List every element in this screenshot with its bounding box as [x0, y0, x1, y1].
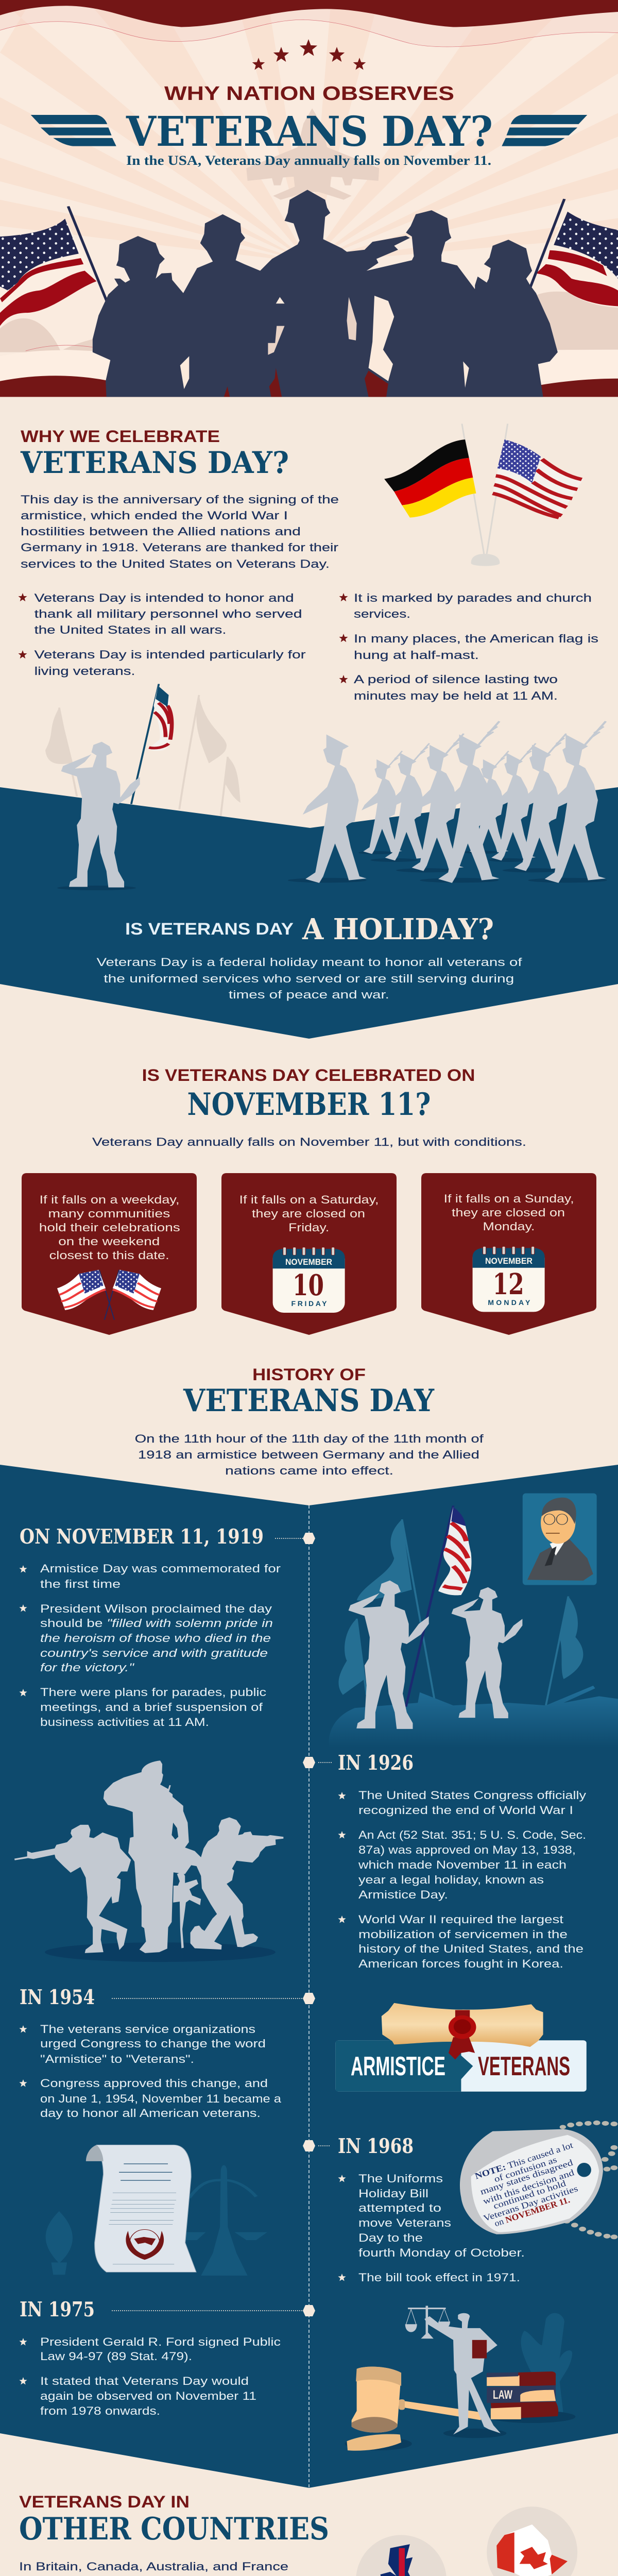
timeline entry 1919: should be "filled with solemn pride in [40, 1617, 273, 1630]
icon: dog tag note: Veterans Day activities [482, 2183, 579, 2223]
card: sunday [421, 1173, 596, 1335]
illustration: document scroll with scales [46, 2145, 267, 2276]
timeline entry 1926: IN 1926 [338, 1751, 414, 1775]
timeline entry 1968: Day to the [358, 2231, 423, 2244]
timeline entry 1919 [19, 1525, 315, 1728]
countries intro: In Britain, Canada, Australia, and France [19, 2560, 288, 2573]
holiday description: the uniformed services who served or are still serving during [104, 972, 514, 985]
timeline entry 1954: on June 1, 1954, November 11 became a [40, 2092, 282, 2105]
intro paragraph: This day is the anniversary of the signing of the [21, 493, 339, 506]
holiday description: Veterans Day is a federal holiday meant to honor all veterans of [97, 956, 523, 969]
card: weekday [22, 1173, 197, 1335]
card: sunday: they are closed on [452, 1206, 565, 1219]
history intro [135, 1432, 484, 1477]
section: why we celebrate [18, 423, 598, 702]
hero banner [0, 0, 618, 397]
bullets left column: the United States in all wars. [35, 623, 227, 636]
card: saturday [221, 1173, 397, 1335]
card: sunday: If it falls on a Sunday, [444, 1192, 574, 1205]
heading: a holiday: A HOLIDAY? [302, 912, 494, 946]
icon: calendar monday 12: NOVEMBER [485, 1256, 533, 1266]
section: veterans day in other countries [18, 2493, 599, 2576]
heading small: IS VETERANS DAY CELEBRATED ON [142, 1066, 475, 1084]
five saluting soldiers silhouette [93, 190, 558, 397]
timeline entry 1926: year a legal holiday, known as [358, 1873, 544, 1886]
intro paragraph: armistice, which ended the World War I [21, 509, 288, 522]
card: saturday: If it falls on a Saturday, [239, 1193, 379, 1206]
heading large: OTHER COUNTRIES [19, 2511, 329, 2547]
timeline entry 1926: Armistice Day. [358, 1888, 448, 1901]
icon: dog tag note: continued to hold [492, 2178, 568, 2211]
heading large: NOVEMBER 11? [187, 1087, 431, 1123]
card: weekday: hold their celebrations [39, 1221, 180, 1234]
intro paragraph [21, 493, 339, 570]
timeline entry 1919: ON NOVEMBER 11, 1919 [20, 1525, 264, 1549]
timeline entry 1968: move Veterans [358, 2216, 451, 2229]
card: saturday: they are closed on [252, 1207, 365, 1220]
hero heading small: WHY NATION OBSERVES [164, 83, 454, 105]
timeline entry 1968: Holiday Bill [358, 2187, 428, 2200]
timeline entry 1919: President Wilson proclaimed the day [40, 1602, 272, 1615]
heading: is veterans day: IS VETERANS DAY [125, 920, 294, 938]
timeline entry 1919: meetings, and a brief suspension of [40, 1701, 263, 1714]
heading large: veterans day: VETERANS DAY [183, 1383, 435, 1419]
illustration: soldiers saluting the flag [329, 1505, 618, 1748]
timeline entry 1926: which made November 11 in each [358, 1858, 566, 1871]
intro paragraph: Germany in 1918. Veterans are thanked for their [21, 541, 338, 554]
map: united kingdom [356, 2535, 447, 2576]
timeline entry 1954 [19, 1986, 315, 2120]
timeline entry 1926: American forces fought in Korea. [358, 1957, 563, 1970]
history intro: 1918 an armistice between Germany and the Allied [138, 1448, 479, 1461]
right american flag [530, 199, 618, 308]
timeline entry 1968: The bill took effect in 1971. [358, 2271, 520, 2284]
icon: calendar friday 10: NOVEMBER [285, 1257, 332, 1267]
timeline entry 1919: country's service and with gratitude [40, 1647, 268, 1659]
timeline entry 1975: President Gerald R. Ford signed Public [40, 2335, 281, 2348]
illustration: justice figure with gavel and books: LAW [493, 2388, 512, 2402]
illustration: three armed soldiers [14, 1760, 283, 1962]
heading small: history of: HISTORY OF [252, 1365, 366, 1384]
bullets right column: It is marked by parades and church [354, 591, 592, 604]
history intro: On the 11th hour of the 11th day of the 11th month of [135, 1432, 484, 1445]
card: weekday: If it falls on a weekday, [39, 1193, 179, 1206]
timeline entry 1926 [303, 1751, 586, 1970]
icon: dog tag note: on NOVEMBER 11. [493, 2195, 571, 2228]
icon: calendar friday 10: FRIDAY [291, 1299, 327, 1308]
stars arc [252, 39, 366, 70]
icon: calendar monday 12: 12 [493, 1267, 524, 1301]
holiday description: times of peace and war. [229, 988, 389, 1001]
bullets left column: living veterans. [35, 665, 135, 677]
timeline entry 1975: It stated that Veterans Day would [40, 2375, 249, 2387]
timeline entry 1919: There were plans for parades, public [40, 1686, 266, 1699]
navy background [0, 1465, 618, 2488]
heading small: why we celebrate: WHY WE CELEBRATE [21, 427, 220, 446]
icon: calendar monday 12: MONDAY [488, 1298, 530, 1307]
bullets right column: A period of silence lasting two [354, 673, 558, 686]
timeline entry 1954: urged Congress to change the word [40, 2037, 266, 2050]
timeline entry 1968: attempted to [358, 2201, 441, 2214]
conditions intro: Veterans Day annually falls on November 11, but with conditions. [92, 1136, 526, 1148]
intro paragraph: hostilities between the Allied nations and [21, 525, 301, 538]
timeline entry 1926: mobilization of servicemen in the [358, 1928, 568, 1941]
bullets left column: Veterans Day is intended to honor and [35, 591, 294, 604]
timeline entry 1926: An Act (52 Stat. 351; 5 U. S. Code, Sec. [358, 1828, 586, 1841]
icon: crossed american flags [57, 1270, 161, 1320]
panel: history timeline [0, 1465, 618, 2488]
background tan flags [45, 695, 241, 816]
bullets left column: thank all military personnel who served [35, 607, 302, 620]
icon: dog tag note: of confusion as [493, 2155, 558, 2184]
hero subtitle: In the USA, Veterans Day annually falls on November 11. [126, 153, 491, 168]
graphic: armistice to veterans scroll [335, 2003, 587, 2092]
wing icon right [502, 115, 587, 146]
section: is veterans day celebrated on november 11 [22, 1066, 596, 1335]
timeline entry 1954: "Armistice" to "Veterans". [40, 2053, 194, 2065]
seal emblem [130, 2230, 160, 2256]
timeline entry 1954: The veterans service organizations [40, 2023, 255, 2036]
illustration: justice figure with gavel and books [345, 2306, 575, 2451]
graphic: armistice to veterans scroll: ARMISTICE [351, 2052, 445, 2081]
bullets left column [18, 591, 306, 677]
timeline entry 1919: the heroism of those who died in the [40, 1632, 271, 1645]
bullets right column: minutes may be held at 11 AM. [354, 689, 558, 702]
timeline entry 1926: 87a) was approved on May 13, 1938, [358, 1843, 576, 1856]
timeline entry 1919: the first time [40, 1578, 121, 1590]
timeline entry 1975 [19, 2298, 315, 2417]
bullets right column: services. [354, 607, 410, 620]
bullets right column: hung at half-mast. [354, 649, 479, 662]
background scales of justice [185, 2165, 267, 2276]
timeline entry 1975: from 1978 onwards. [40, 2404, 160, 2417]
timeline entry 1954: Congress approved this change, and [40, 2077, 268, 2090]
icon: dog tag note [460, 2121, 617, 2239]
icon: dog tag note: with this decision and [482, 2167, 576, 2206]
timeline entry 1968: The Uniforms [358, 2172, 443, 2185]
heading large: veterans day: VETERANS DAY? [20, 445, 289, 480]
country maps with calendar [356, 2506, 599, 2576]
background plant [46, 2211, 73, 2275]
timeline entry 1926: recognized the end of World War I [358, 1804, 573, 1817]
intro paragraph: services to the United States on Veterans Day. [21, 557, 330, 570]
saluting soldier with american flag [57, 684, 172, 890]
bullets right column: In many places, the American flag is [354, 632, 598, 645]
map: canada [487, 2506, 577, 2576]
icon: portrait of president wilson [523, 1493, 597, 1585]
card: saturday: Friday. [288, 1221, 329, 1234]
history intro: nations came into effect. [225, 1464, 393, 1477]
bullets right column [339, 591, 598, 702]
timeline entry 1954: day to honor all American veterans. [40, 2107, 261, 2120]
timeline entry 1919: for the victory." [40, 1661, 134, 1674]
icon: german and american desk flags [384, 423, 583, 566]
card: weekday: closest to this date. [49, 1249, 169, 1262]
timeline entry 1975: IN 1975 [20, 2298, 95, 2321]
marching soldiers [288, 721, 607, 883]
holiday description [97, 956, 523, 1001]
icon: dog tag note: NOTE: This caused a lot [474, 2140, 574, 2181]
timeline entry 1968: fourth Monday of October. [358, 2246, 525, 2259]
section: history heading [135, 1365, 484, 1477]
hero heading large: VETERANS DAY? [126, 107, 493, 156]
card: weekday: on the weekend [58, 1235, 160, 1248]
icon: calendar friday 10: 10 [293, 1268, 324, 1302]
hero artwork background [0, 0, 618, 397]
timeline entry 1919: business activities at 11 AM. [40, 1716, 209, 1728]
card: sunday: Monday. [483, 1220, 535, 1233]
timeline entry 1968 [303, 2134, 525, 2284]
left american flag [0, 207, 107, 329]
card: weekday: many communities [48, 1207, 170, 1220]
bullets left column: Veterans Day is intended particularly for [35, 648, 306, 661]
timeline entry 1926: The United States Congress officially [358, 1789, 586, 1802]
timeline entry 1926: World War II required the largest [358, 1913, 563, 1926]
icon: calendar friday 10 [273, 1247, 345, 1313]
timeline entry 1968: IN 1968 [338, 2134, 414, 2158]
timeline entry 1975: Law 94-97 (89 Stat. 479). [40, 2350, 192, 2363]
fighter jet silhouette [246, 108, 379, 200]
navy chevron band [0, 787, 618, 1039]
timeline entry 1975: again be observed on November 11 [40, 2389, 256, 2402]
heading small: VETERANS DAY IN [19, 2493, 190, 2511]
timeline entry 1926: history of the United States, and the [358, 1942, 583, 1955]
icon: dog tag note: many states disagreed [479, 2157, 574, 2197]
wing icon left [31, 115, 116, 146]
icon: calendar monday 12 [473, 1246, 545, 1312]
panel: is veterans day a holiday [0, 684, 618, 1039]
timeline entry 1919: Armistice Day was commemorated for [40, 1562, 281, 1575]
timeline entry 1954: IN 1954 [20, 1986, 95, 2009]
